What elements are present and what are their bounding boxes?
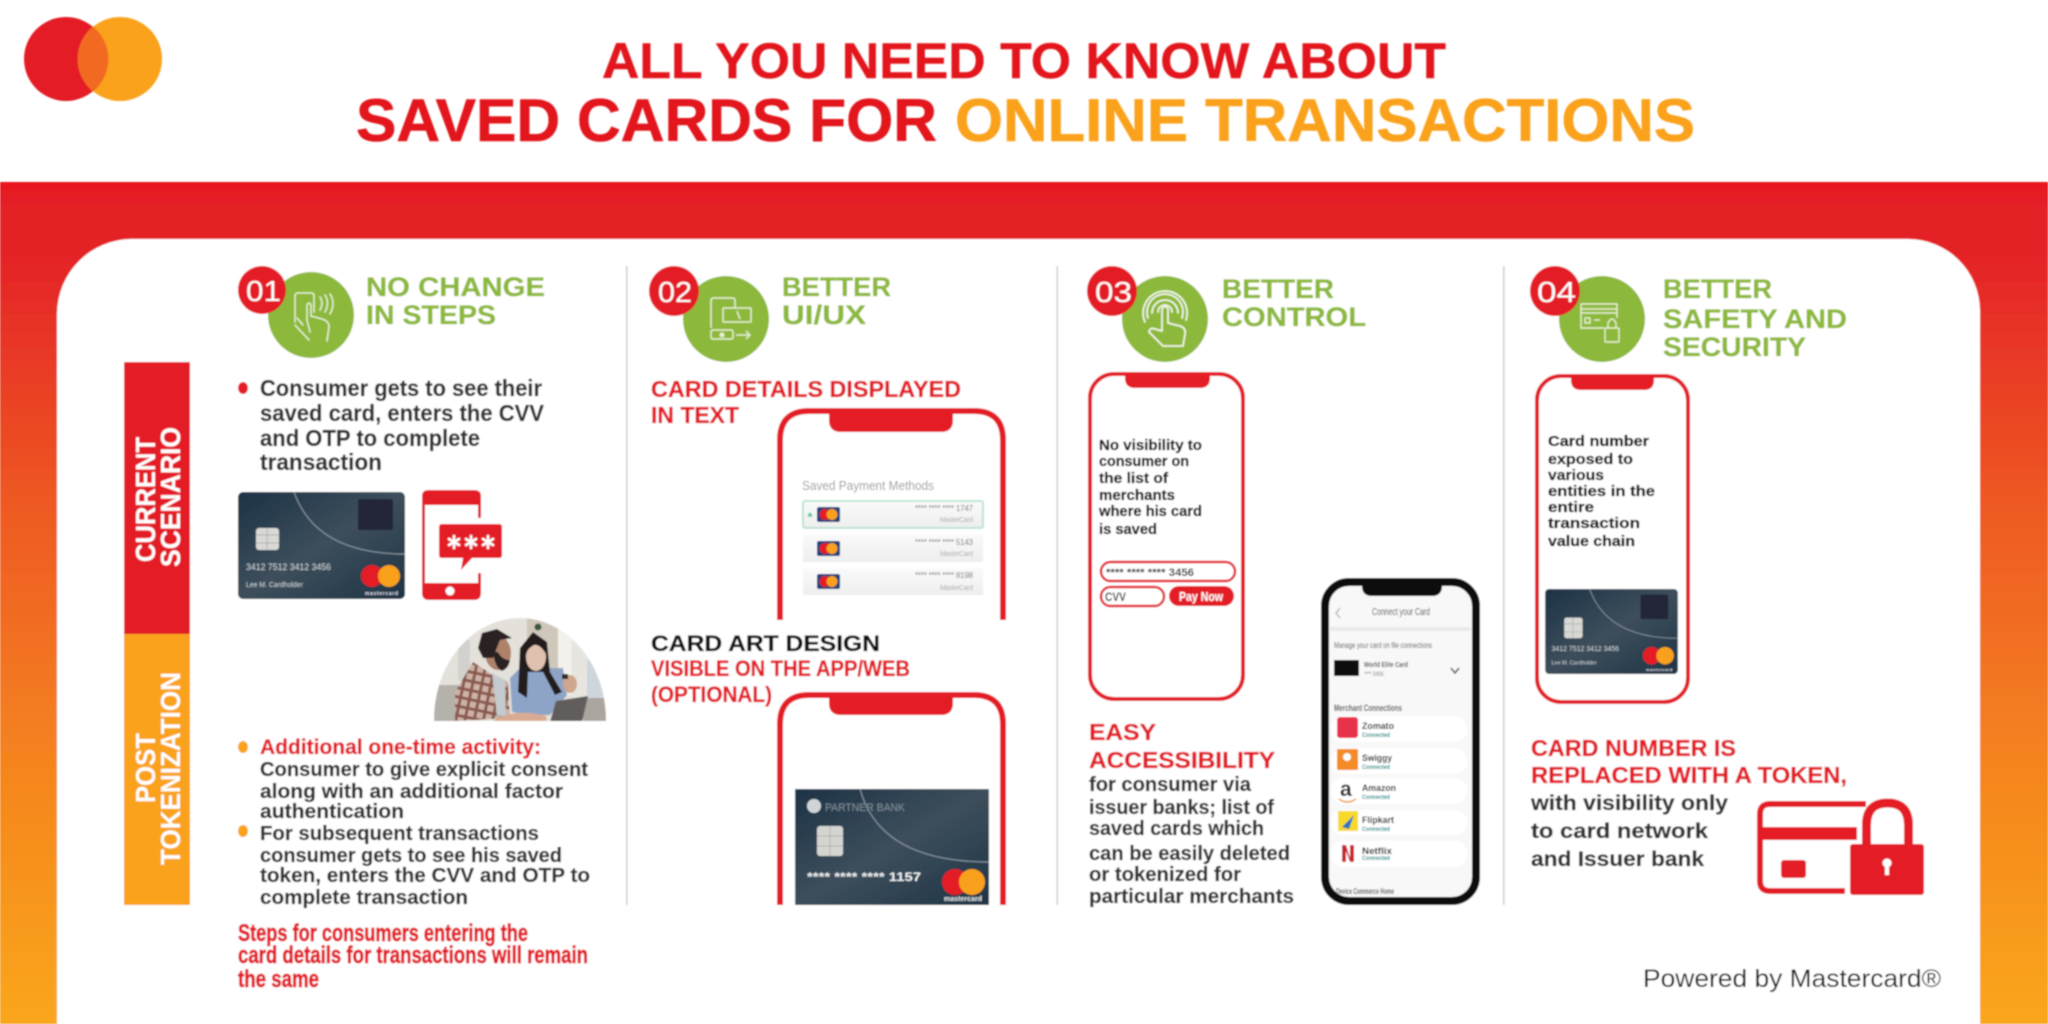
heading [1663, 274, 1847, 362]
badge 01 [238, 266, 286, 314]
phone: card number exposed: various [1548, 467, 1604, 484]
easy accessibility text: or tokenized for [1089, 864, 1241, 886]
heading: BETTER [1222, 274, 1334, 304]
phone: merchant connections: World Elite Card [1364, 662, 1408, 669]
card details text: IN TEXT [651, 402, 739, 428]
title: SAVED CARDS FOR [356, 87, 937, 154]
panel: column 1 no change in steps [238, 266, 607, 993]
title: ONLINE TRANSACTIONS [955, 87, 1695, 154]
phone: merchant connections [1325, 582, 1476, 901]
phone: no visibility: is saved [1099, 521, 1157, 538]
heading: CONTROL [1222, 302, 1366, 332]
badge 02 [649, 266, 699, 316]
heading: BETTER [1663, 274, 1772, 304]
badge 02: 02 [658, 277, 692, 309]
phone: merchant connections: Flipkart [1362, 815, 1394, 825]
phone: merchant connections: Connected [1362, 827, 1390, 833]
phone: no visibility: merchants [1099, 487, 1175, 504]
current scenario text [238, 375, 545, 475]
token text: REPLACED WITH A TOKEN, [1531, 762, 1847, 788]
easy accessibility text: ACCESSIBILITY [1089, 747, 1275, 773]
post tokenization text: consumer gets to see his saved [260, 845, 562, 867]
title [356, 33, 1695, 154]
token text [1530, 735, 1847, 871]
post tokenization text: complete transaction [260, 887, 468, 909]
easy accessibility text: for consumer via [1089, 774, 1252, 796]
phone: merchant connections: Connect your Card [1372, 607, 1430, 618]
phone: merchant connections: Swiggy [1362, 753, 1392, 763]
card details text: CARD DETAILS DISPLAYED [651, 376, 961, 402]
phone: no visibility: consumer on [1099, 453, 1189, 470]
phone: saved payment methods: MasterCard [940, 585, 973, 592]
heading: SECURITY [1663, 332, 1806, 362]
post tokenization text: authentication [260, 801, 404, 823]
badge 04 [1530, 266, 1580, 316]
heading: BETTER [782, 272, 891, 302]
easy accessibility text: can be easily deleted [1089, 843, 1290, 865]
phone: card number exposed: 3412 7512 3412 3456 [1552, 645, 1619, 653]
easy accessibility text: particular merchants [1089, 886, 1294, 908]
side label: post tokenization: TOKENIZATION [155, 672, 186, 865]
card image: Lee M. Cardholder [246, 582, 304, 589]
post tokenization text: Consumer to give explicit consent [260, 759, 588, 781]
heading: NO CHANGE [366, 272, 545, 302]
phone: saved payment methods: **** **** **** 8198 [915, 571, 974, 580]
easy accessibility text [1089, 719, 1294, 908]
icon: touch gesture on green circle [1122, 276, 1208, 362]
footnote [238, 920, 588, 993]
heading [366, 272, 545, 330]
photo: couple with laptop [433, 618, 607, 722]
phone: saved payment methods: Saved Payment Methods [802, 478, 934, 493]
powered by note: Powered by Mastercard® [1643, 965, 1942, 993]
footnote: Steps for consumers entering the [238, 920, 528, 947]
phone: merchant connections: Connected [1362, 733, 1390, 739]
phone: merchant connections: Connected [1362, 795, 1390, 801]
icon: wallet on green circle [683, 276, 769, 362]
side label: post tokenization [124, 634, 190, 905]
card art text: VISIBLE ON THE APP/WEB [651, 656, 910, 681]
card art text: (OPTIONAL) [651, 682, 772, 707]
phone: merchant connections: Connected [1362, 856, 1390, 862]
phone: no visibility: Pay Now [1179, 589, 1224, 604]
easy accessibility text: EASY [1089, 719, 1156, 745]
phone: card number exposed: value chain [1548, 533, 1635, 550]
icon: card and padlock [1758, 803, 1924, 895]
side label: post tokenization: POST [130, 733, 161, 803]
title: ALL YOU NEED TO KNOW ABOUT [602, 33, 1446, 89]
phone: merchant connections: a [1340, 778, 1352, 801]
side label: current scenario: SCENARIO [155, 427, 186, 567]
white content panel [57, 239, 1980, 1024]
phone: card number exposed: Lee M. Cardholder [1552, 660, 1597, 666]
card image: 3412 7512 3412 3456 [246, 562, 331, 572]
post tokenization text: For subsequent transactions [260, 823, 539, 845]
phone: saved payment methods: MasterCard [940, 551, 973, 558]
phone: merchant connections: Device Commerce Home [1336, 887, 1394, 896]
phone: card art: mastercard [944, 896, 982, 903]
easy accessibility text: saved cards which [1089, 818, 1264, 840]
panel: column 2 better ui/ux [649, 266, 1003, 905]
footnote: card details for transactions will remain [238, 942, 588, 969]
icon: tap phone on green circle [268, 272, 354, 358]
phone: card art: PARTNER BANK [825, 802, 906, 814]
phone: saved payment methods: **** **** **** 1747 [915, 504, 974, 513]
token text: CARD NUMBER IS [1531, 735, 1736, 761]
token text: with visibility only [1530, 792, 1728, 815]
phone: card number exposed: mastercard [1646, 667, 1673, 672]
side label: current scenario [124, 362, 190, 634]
side label: current scenario: CURRENT [130, 437, 161, 562]
phone: card art: **** **** **** 1157 [807, 870, 921, 884]
badge 01: 01 [246, 276, 281, 308]
card details text [651, 376, 961, 428]
heading: IN STEPS [366, 300, 496, 330]
phone: card number exposed: transaction [1548, 515, 1640, 532]
current scenario text: Consumer gets to see their [260, 375, 542, 401]
panel: column 3 better control [1087, 266, 1476, 908]
heading: UI/UX [782, 300, 866, 330]
phone: card number exposed [1537, 375, 1688, 702]
panel: column 4 better safety and security [1530, 266, 1924, 895]
post tokenization text: Additional one-time activity: [260, 736, 541, 759]
phone: merchant connections: **** 3456 [1364, 672, 1385, 678]
post tokenization text: token, enters the CVV and OTP to [260, 865, 590, 887]
phone: card number exposed: Card number [1548, 433, 1649, 450]
card image [237, 491, 406, 600]
phone: no visibility: the list of [1099, 470, 1169, 487]
heading: SAFETY AND [1663, 304, 1847, 334]
badge 04: 04 [1537, 277, 1576, 309]
phone: no visibility: **** **** **** 3456 [1106, 567, 1194, 579]
card art text [651, 631, 910, 707]
badge 03: 03 [1095, 277, 1132, 309]
phone: no visibility: No visibility to [1099, 437, 1202, 454]
phone: saved payment methods [780, 411, 1003, 620]
post tokenization text: along with an additional factor [260, 781, 563, 803]
easy accessibility text: issuer banks; list of [1089, 797, 1274, 819]
phone: merchant connections: Merchant Connections [1334, 703, 1402, 713]
phone: merchant connections: Zomato [1362, 721, 1394, 731]
phone: card number exposed: entities in the [1548, 483, 1655, 500]
badge 03 [1087, 266, 1137, 316]
token text: and Issuer bank [1531, 848, 1704, 871]
heading [1222, 274, 1366, 332]
phone: saved payment methods: MasterCard [940, 517, 973, 524]
phone: merchant connections: Netflix [1362, 846, 1392, 856]
phone: merchant connections: Manage your card on file connections [1334, 641, 1432, 650]
phone: card number exposed: exposed to [1548, 451, 1633, 468]
post tokenization text [238, 736, 590, 909]
current scenario text: and OTP to complete [260, 425, 480, 451]
token text: to card network [1531, 820, 1708, 843]
phone: card number exposed: entire [1548, 499, 1594, 516]
phone: merchant connections: Connected [1362, 765, 1390, 771]
phone: no visibility [1090, 373, 1243, 699]
footnote: the same [238, 966, 319, 993]
heading [782, 272, 891, 330]
current scenario text: transaction [260, 449, 382, 475]
phone: no visibility: CVV [1105, 590, 1126, 604]
icon: phone with otp bubble [422, 490, 502, 600]
card image: mastercard [365, 591, 398, 597]
current scenario text: saved card, enters the CVV [260, 400, 545, 426]
icon: card with lock on green circle [1559, 276, 1645, 362]
phone: saved payment methods: **** **** **** 5143 [915, 538, 974, 547]
phone: merchant connections: Amazon [1362, 783, 1396, 793]
phone: card art [780, 695, 1003, 905]
logo [24, 17, 162, 101]
phone: no visibility: where his card [1098, 503, 1202, 520]
card art text: CARD ART DESIGN [651, 631, 880, 656]
